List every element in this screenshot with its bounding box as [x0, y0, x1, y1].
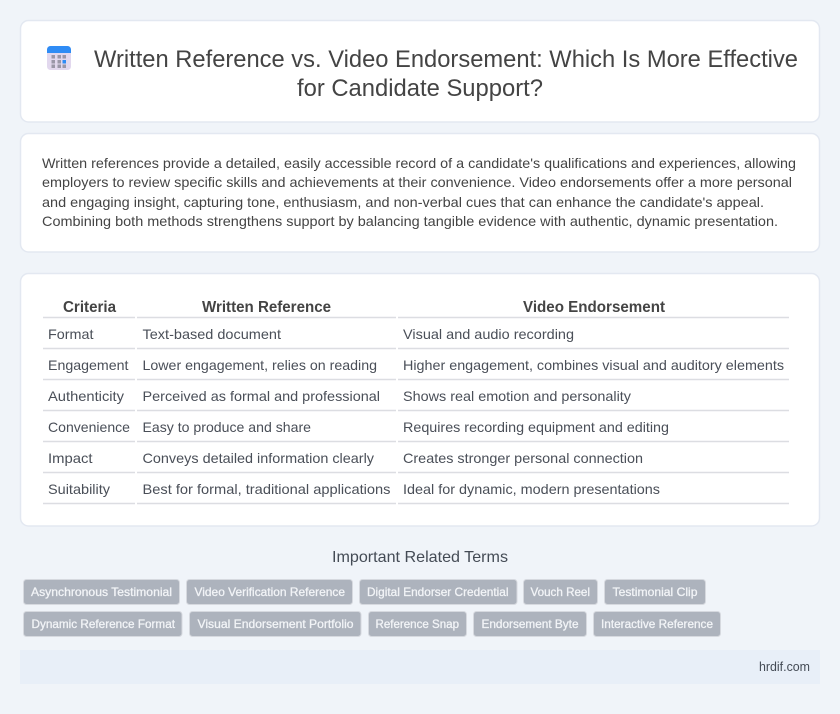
- row: suitability: Best for formal, traditional applications: [142, 481, 390, 497]
- row: convenience: [48, 419, 669, 435]
- tag: vouch reel: [524, 580, 598, 604]
- row: convenience: Requires recording equipment and editing: [403, 419, 669, 435]
- panel: title header: [20, 20, 820, 122]
- title: Written Reference vs. Video Endorsement: Which Is More Effective: [94, 46, 798, 73]
- heading: important related terms: Important Related Terms: [332, 549, 508, 566]
- row: impact: Creates stronger personal connection: [403, 450, 643, 466]
- tag: testimonial clip: Testimonial Clip: [612, 585, 698, 599]
- tag: digital endorser credential: [360, 580, 517, 604]
- row: engagement: Engagement: [48, 357, 129, 373]
- row: engagement: [48, 357, 784, 373]
- table header row: [63, 299, 666, 316]
- tag: video verification reference: Video Verification Reference: [194, 585, 345, 599]
- row: suitability: [48, 481, 660, 497]
- row: format: Visual and audio recording: [403, 326, 574, 342]
- panel: summary text: [20, 134, 820, 252]
- table header row: Video Endorsement: [523, 299, 666, 316]
- tag: interactive reference: [594, 612, 720, 636]
- tag: vouch reel: Vouch Reel: [530, 585, 590, 599]
- tag: dynamic reference format: [24, 612, 182, 636]
- tag: endorsement byte: Endorsement Byte: [482, 617, 579, 631]
- tag: reference snap: [368, 612, 466, 636]
- tag: asynchronous testimonial: Asynchronous Testimonial: [31, 585, 172, 599]
- footer: hrdif.com: [759, 659, 810, 674]
- row: convenience: Convenience: [48, 419, 130, 435]
- row: authenticity: [48, 388, 631, 404]
- tag: testimonial clip: [604, 580, 706, 604]
- tag: dynamic reference format: Dynamic Reference Format: [32, 617, 176, 631]
- related term tags: [24, 580, 720, 636]
- panel: summary text: and engaging insight, capturing tone, enthusiasm, and non-verbal cues that can enhance the candidate's appeal.: [42, 194, 764, 210]
- tag: interactive reference: Interactive Reference: [601, 617, 713, 631]
- panel: summary text: employers to review specific skills and achievements at their convenience. Video endorsements offer a more personal: [42, 174, 792, 190]
- title: [94, 46, 798, 102]
- tag: video verification reference: [186, 580, 352, 604]
- table header row: Written Reference: [202, 299, 331, 316]
- tag: visual endorsement portfolio: Visual Endorsement Portfolio: [198, 617, 354, 631]
- row: authenticity: Perceived as formal and professional: [142, 388, 380, 404]
- icon: calendar: [47, 46, 71, 70]
- footer: [20, 650, 820, 684]
- tag: endorsement byte: [474, 612, 586, 636]
- row: engagement: Lower engagement, relies on reading: [142, 357, 377, 373]
- row: suitability: Suitability: [48, 481, 110, 497]
- tag: visual endorsement portfolio: [190, 612, 361, 636]
- row: suitability: Ideal for dynamic, modern presentations: [403, 481, 660, 497]
- tag: reference snap: Reference Snap: [376, 617, 459, 631]
- row: engagement: Higher engagement, combines visual and auditory elements: [403, 357, 784, 373]
- row: convenience: Easy to produce and share: [142, 419, 311, 435]
- title: for Candidate Support?: [297, 75, 543, 102]
- panel: summary text: Written references provide a detailed, easily accessible record of a candidate's qualifications and experiences, allowing: [42, 155, 796, 171]
- table header row: Criteria: [63, 299, 116, 316]
- row: format: Format: [48, 326, 94, 342]
- row: impact: [48, 450, 643, 466]
- tag: digital endorser credential: Digital Endorser Credential: [367, 585, 508, 599]
- tag: asynchronous testimonial: [24, 580, 180, 604]
- panel: comparison table: [20, 274, 820, 526]
- row: format: [48, 326, 574, 342]
- row: authenticity: Shows real emotion and personality: [403, 388, 631, 404]
- row: format: Text-based document: [142, 326, 281, 342]
- panel: summary text: Combining both methods strengthens support by balancing tangible evidence with authentic, dynamic presentation.: [42, 213, 778, 229]
- row: authenticity: Authenticity: [48, 388, 124, 404]
- row: impact: Conveys detailed information clearly: [142, 450, 374, 466]
- row: impact: Impact: [48, 450, 93, 466]
